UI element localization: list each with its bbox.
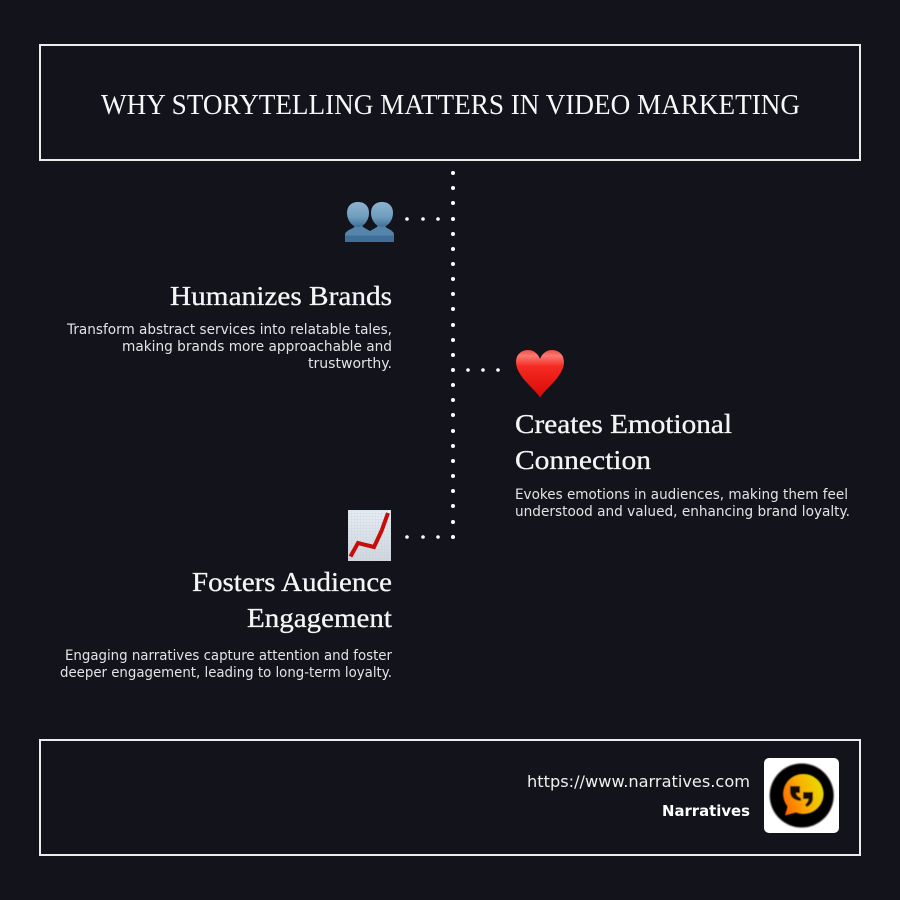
heading: Engagement xyxy=(247,603,393,633)
logo xyxy=(764,758,839,833)
dotted timeline xyxy=(451,171,455,539)
description: trustworthy. xyxy=(308,356,392,372)
heading: Fosters Audience xyxy=(192,567,392,597)
description: making brands more approachable and xyxy=(122,339,392,355)
footer brand name: Narratives xyxy=(662,802,750,820)
heading: Connection xyxy=(515,445,652,475)
block: fosters audience engagement xyxy=(60,567,393,681)
connector: audience engagement xyxy=(405,535,440,539)
connector: emotional connection xyxy=(466,368,500,372)
description xyxy=(60,648,392,681)
description: Evokes emotions in audiences, making them feel xyxy=(515,487,848,503)
description: Transform abstract services into relatable tales, xyxy=(66,322,392,338)
icon: red heart xyxy=(516,350,564,398)
heading xyxy=(515,409,732,475)
description: understood and valued, enhancing brand loyalty. xyxy=(515,504,850,520)
description: Engaging narratives capture attention and foster xyxy=(65,648,392,664)
title box xyxy=(40,45,860,160)
heading: Humanizes Brands xyxy=(170,281,392,311)
description xyxy=(515,487,850,520)
connector: humanizes brands xyxy=(405,217,440,221)
block: humanizes brands xyxy=(66,281,392,372)
heading: Creates Emotional xyxy=(515,409,732,439)
footer url: https://www.narratives.com xyxy=(527,772,750,791)
icon: people silhouettes xyxy=(345,202,394,242)
icon: rising chart xyxy=(348,510,391,561)
title: WHY STORYTELLING MATTERS IN VIDEO MARKETING xyxy=(101,90,800,121)
footer box xyxy=(40,740,860,855)
description xyxy=(66,322,392,372)
block: creates emotional connection xyxy=(515,409,850,520)
heading xyxy=(192,567,393,633)
description: deeper engagement, leading to long-term loyalty. xyxy=(60,665,392,681)
